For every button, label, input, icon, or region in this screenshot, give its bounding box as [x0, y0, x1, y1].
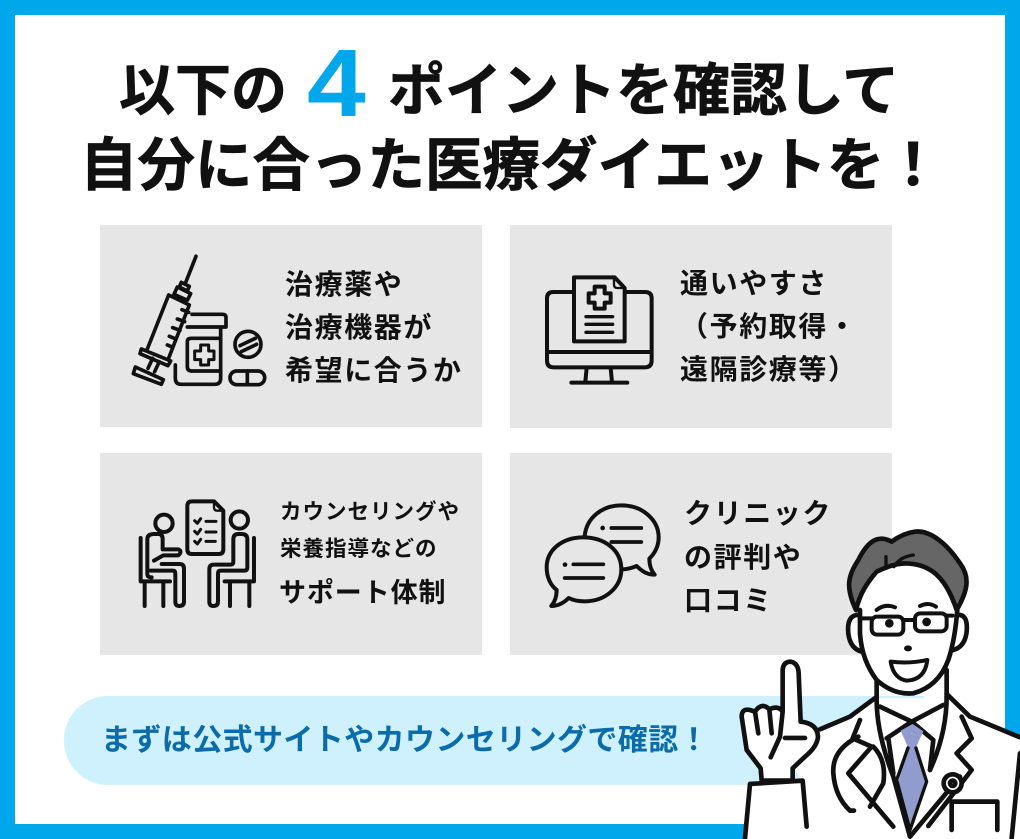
illustration: doctor — [742, 532, 1020, 839]
panel: support — [100, 453, 482, 655]
stethoscope — [833, 737, 884, 811]
support text large: サポート体制 — [279, 578, 446, 608]
panel: reviews — [510, 453, 892, 655]
tie — [898, 724, 927, 826]
title — [80, 30, 942, 198]
icon: monitor with medical record — [547, 277, 652, 383]
title line 1 continued: ポイントを確認して — [388, 59, 899, 123]
icon: speech bubbles — [547, 505, 659, 606]
icon: syringe and medicine — [133, 256, 265, 385]
eyebrows — [877, 604, 936, 610]
face — [858, 563, 958, 693]
title line 1: 以下の — [119, 59, 287, 122]
highlighted number 4: 4 — [307, 30, 366, 137]
shirt and collar — [877, 698, 947, 837]
access text: 通いやすさ （予約取得・ 遠隔診療等） — [680, 268, 858, 385]
ears — [848, 615, 967, 652]
glasses — [862, 616, 953, 620]
lapels — [848, 697, 972, 837]
medicine text: 治療薬や 治療機器が 希望に合うか — [285, 269, 463, 386]
panel: access — [510, 225, 892, 428]
eyes and nose — [885, 619, 894, 628]
panel: medicine — [100, 225, 482, 427]
hair — [849, 532, 967, 610]
coat — [745, 698, 1020, 839]
title line 2: 自分に合った医療ダイエットを！ — [80, 134, 942, 198]
callout bar — [64, 696, 924, 785]
hand — [742, 662, 818, 781]
callout text: まずは公式サイトやカウンセリングで確認！ — [101, 724, 709, 757]
support text small: カウンセリングや 栄養指導などの — [280, 500, 460, 561]
icon: counseling — [141, 501, 254, 606]
mouth — [891, 660, 927, 681]
reviews text: クリニック の評判や 口コミ — [684, 498, 832, 616]
